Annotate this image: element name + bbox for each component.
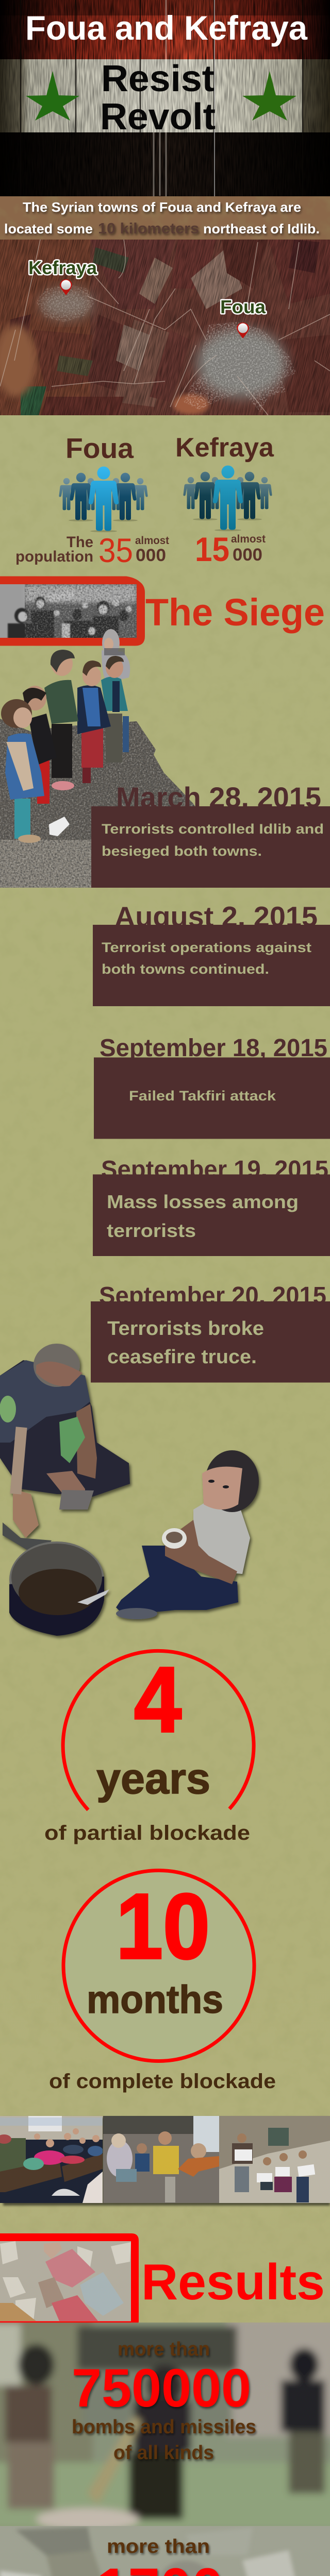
icon: Foua people xyxy=(59,467,148,532)
icon: Kefraya people xyxy=(183,466,272,531)
panel: bombs and missiles xyxy=(0,2318,330,2535)
map label: Foua: Foua xyxy=(220,296,266,317)
heading panel: Results xyxy=(0,2233,325,2327)
ring xyxy=(63,1870,254,2061)
subtitle line: Resist: Resist xyxy=(101,58,214,99)
population panel xyxy=(15,432,274,569)
child 3 xyxy=(44,650,78,790)
timeline event: March 28, 2015: March 28. 2015 xyxy=(116,781,321,814)
timeline event: September 18, 2015 xyxy=(94,1035,330,1139)
timeline event: September 18, 2015: Failed Takfiri attack xyxy=(129,1088,276,1104)
stat text xyxy=(93,2536,228,2576)
timeline event: August 2, 2015: Terrorist operations against xyxy=(102,940,311,955)
stat text: of all kinds xyxy=(113,2442,214,2464)
icon: right star xyxy=(242,71,296,121)
stat text: more than xyxy=(118,2338,210,2360)
label years: years xyxy=(96,1754,210,1803)
timeline event: March 28, 2015: Terrorists controlled Idlib and xyxy=(102,821,324,837)
ring xyxy=(63,1651,254,1810)
heading: Kefraya: Kefraya xyxy=(175,433,274,463)
timeline event: September 20, 2015 xyxy=(91,1282,330,1383)
caption: of complete blockade xyxy=(49,2070,276,2093)
timeline event: September 20, 2015: Terrorists broke xyxy=(107,1318,264,1340)
caption: of partial blockade xyxy=(44,1822,250,1844)
population label: population xyxy=(15,548,93,565)
timeline event: August 2, 2015 xyxy=(93,901,330,1006)
Foua population figure: almost xyxy=(135,535,169,547)
subtitle line: Revolt: Revolt xyxy=(100,96,216,138)
photo: children with signs xyxy=(219,2116,330,2203)
population label: The xyxy=(67,534,93,551)
number 4: 4 xyxy=(134,1648,182,1752)
Kefraya population figure: 15 xyxy=(195,530,229,568)
timeline event: September 18, 2015: September 18, 2015 xyxy=(100,1035,327,1062)
intro text band: located some xyxy=(4,221,93,236)
number 10: 10 xyxy=(116,1875,210,1978)
timeline event: September 19, 2015 xyxy=(93,1156,330,1256)
photo: children in a cart xyxy=(0,2116,103,2203)
photo: wounded children xyxy=(103,2116,219,2203)
timeline event: August 2, 2015: August 2. 2015 xyxy=(114,901,318,933)
intro text band: northeast of Idlib. xyxy=(203,221,320,236)
stat text: bombs and missiles xyxy=(72,2416,256,2438)
page background: middle xyxy=(0,1262,330,2526)
stat text xyxy=(72,2338,256,2464)
cooking pot xyxy=(9,1541,109,1636)
Kefraya population figure xyxy=(195,530,266,568)
siege crowd photo xyxy=(0,584,137,640)
timeline event: September 19, 2015: terrorists xyxy=(107,1220,196,1241)
stat text: 750000 xyxy=(72,2358,251,2418)
blurred photo: fighters xyxy=(0,2318,330,2535)
icon: Foua map pin xyxy=(237,323,249,338)
photo: children in rubble xyxy=(0,2241,131,2321)
styrofoam xyxy=(49,817,70,836)
heading: Foua: Foua xyxy=(65,432,134,464)
panel: martyrs and wounded xyxy=(0,2526,330,2576)
Foua population figure: 35 xyxy=(98,531,133,569)
heading panel: The Siege xyxy=(0,576,325,646)
child 4 xyxy=(77,660,111,783)
timeline event: September 19, 2015: Mass losses among xyxy=(107,1191,299,1212)
Foua population figure xyxy=(98,531,169,569)
child 1 xyxy=(1,699,44,843)
timeline event: September 19, 2015: September 19, 2015 xyxy=(101,1156,328,1183)
intro text band: The Syrian towns of Foua and Kefraya are xyxy=(23,199,301,215)
page background: lower xyxy=(0,2526,330,2576)
Kefraya population figure: 000 xyxy=(233,545,262,565)
title: The Siege: The Siege xyxy=(145,591,325,634)
title: Foua and Kefraya xyxy=(25,9,308,47)
page background: upper xyxy=(0,415,330,1262)
timeline event: March 28, 2015 xyxy=(91,781,330,888)
satellite map xyxy=(0,240,330,415)
woman xyxy=(102,629,130,683)
stat: 4 years xyxy=(44,1648,254,1844)
header flag panel xyxy=(0,0,330,201)
intro text band: 10 kilometers xyxy=(98,221,199,237)
icon: left star xyxy=(26,71,79,121)
stat: 10 months xyxy=(49,1870,276,2093)
photo: children on rubble xyxy=(0,629,206,889)
intro text band xyxy=(0,196,330,240)
timeline event: August 2, 2015: both towns continued. xyxy=(102,961,269,977)
child 5 xyxy=(101,656,129,762)
blurred photo: rubble xyxy=(0,2526,330,2576)
timeline event: September 20, 2015: September 20, 2015 xyxy=(99,1282,326,1310)
child 2 xyxy=(23,686,57,804)
photo strip: children xyxy=(0,2116,330,2206)
red photo frame xyxy=(0,576,145,646)
boy with cup xyxy=(116,1450,259,1619)
title: Results: Results xyxy=(141,2253,325,2310)
map label: Kefraya: Kefraya xyxy=(28,257,97,278)
population label xyxy=(15,534,93,565)
icon: Kefraya map pin xyxy=(60,279,72,295)
timeline event: September 20, 2015: ceasefire truce. xyxy=(107,1346,257,1368)
Kefraya population figure: almost xyxy=(231,533,266,545)
timeline event: March 28, 2015: besieged both towns. xyxy=(102,843,262,859)
Foua population figure: 000 xyxy=(136,546,166,565)
stat text: more than xyxy=(107,2536,210,2557)
label months: months xyxy=(87,1978,223,2022)
red photo frame xyxy=(0,2233,139,2327)
photo: children with cooking pot xyxy=(0,1344,259,1636)
boy crouching xyxy=(0,1344,130,1551)
